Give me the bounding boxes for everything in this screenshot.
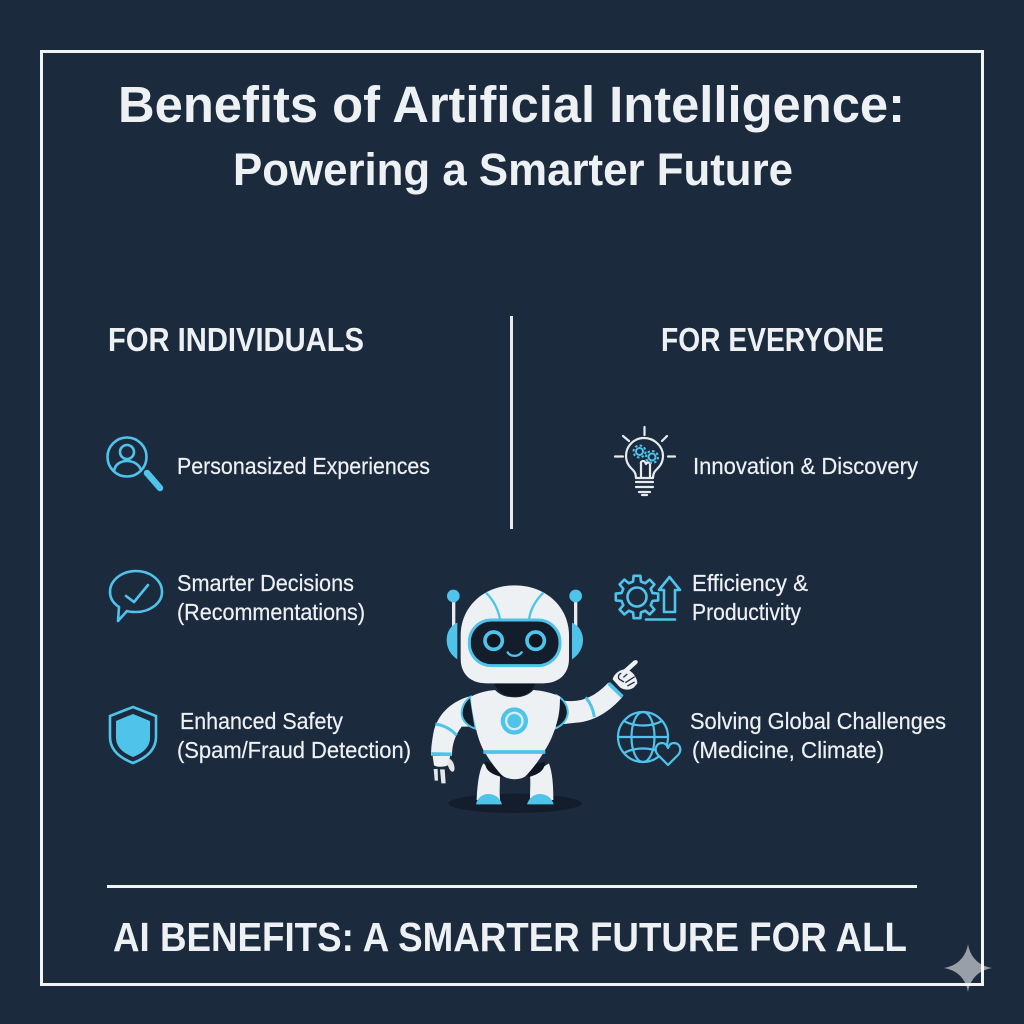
title: Powering a Smarter Future <box>233 144 793 195</box>
text: solving global challenges: (Medicine, Climate) <box>692 737 884 763</box>
robot left arm <box>431 696 475 783</box>
robot visor <box>469 620 560 666</box>
robot chest core <box>501 707 528 735</box>
robot mascot <box>431 585 638 813</box>
footer rule <box>107 885 917 888</box>
icon: speech bubble with check <box>110 571 162 621</box>
text: enhanced safety: Enhanced Safety <box>180 708 343 734</box>
text: efficiency and productivity <box>692 570 808 625</box>
footer text: AI BENEFITS: A SMARTER FUTURE FOR ALL <box>113 914 907 960</box>
text: efficiency and productivity: Productivity <box>692 599 801 625</box>
title: Benefits of Artificial Intelligence: <box>118 76 905 133</box>
icon: light bulb with gears <box>615 427 675 495</box>
text: smarter decisions <box>177 570 365 625</box>
icon: gear with up arrow <box>616 576 680 620</box>
icon: shield <box>110 707 156 763</box>
heading: for individuals: FOR INDIVIDUALS <box>108 321 364 358</box>
text: efficiency and productivity: Efficiency & <box>692 570 808 596</box>
robot belt <box>483 746 545 757</box>
robot neck <box>494 683 535 697</box>
icon: globe with heart <box>618 712 680 765</box>
text: solving global challenges: Solving Global Challenges <box>690 708 946 734</box>
icon: sparkle watermark <box>944 944 992 992</box>
robot right arm <box>555 660 638 725</box>
text: innovation and discovery: Innovation & Discovery <box>693 453 918 479</box>
robot shadow <box>448 794 582 813</box>
text: solving global challenges <box>690 708 946 763</box>
text: smarter decisions: Smarter Decisions <box>177 570 354 596</box>
icon: magnifier with person <box>108 438 160 488</box>
robot shoulders <box>462 695 568 729</box>
text: enhanced safety: (Spam/Fraud Detection) <box>177 737 411 763</box>
heading: for everyone: FOR EVERYONE <box>661 321 884 358</box>
robot antennas <box>447 590 583 659</box>
text: enhanced safety <box>177 708 411 763</box>
robot torso <box>471 690 560 779</box>
text: personalized experiences: Personasized Experiences <box>177 453 430 479</box>
robot face <box>485 632 544 656</box>
robot legs <box>476 762 554 804</box>
title <box>118 76 905 195</box>
text: smarter decisions: (Recommentations) <box>177 599 365 625</box>
center divider <box>510 316 513 529</box>
robot head <box>461 585 569 683</box>
